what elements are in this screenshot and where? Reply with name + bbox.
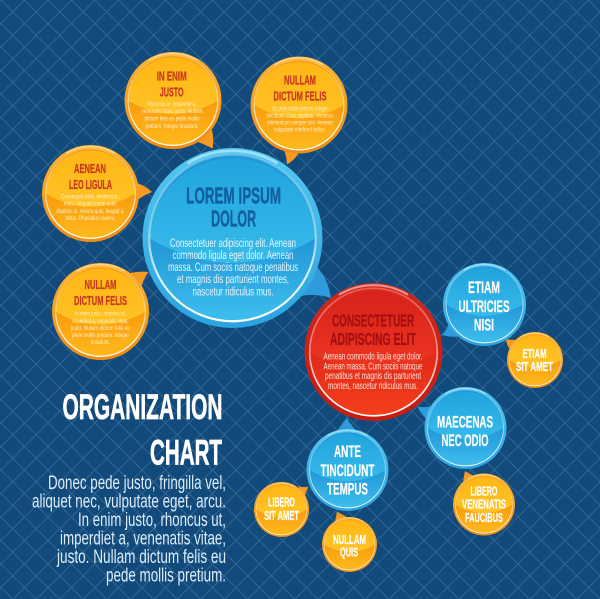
bubble: Maecenas nec odio: NEC ODIO bbox=[442, 432, 489, 450]
bubble: Maecenas nec odio: MAECENAS bbox=[437, 414, 493, 432]
description text: imperdiet a, venenatis vitae, bbox=[60, 528, 226, 550]
bubble: Aenean leo ligula bbox=[42, 145, 152, 242]
bubble: Ante tincidunt tempus: TEMPUS bbox=[327, 480, 368, 498]
bubble: Aenean leo ligula: AENEAN bbox=[74, 162, 106, 176]
bubble: In enim justo: venenatis vitae, justo. Nullam bbox=[142, 108, 202, 115]
bubble: Nullam dictum felis bottom: In enim justo, rhoncus ut, bbox=[75, 310, 126, 318]
panel: Consectetuer adipiscing elit: Aenean massa. Cum sociis natoque bbox=[324, 362, 423, 372]
bubble: Nullam dictum felis top: elementum semper nisi. Aenean bbox=[267, 120, 333, 126]
bubble: Etiam ultricies nisi bbox=[442, 263, 526, 346]
bubble: Etiam ultricies nisi: NISI bbox=[474, 317, 494, 335]
bubble: Etiam ultricies nisi: ULTRICIES bbox=[458, 298, 510, 316]
bubble: In enim justo bbox=[124, 52, 222, 149]
panel: Lorem ipsum dolor: DOLOR bbox=[211, 206, 256, 232]
description text: In enim justo, rhoncus ut, bbox=[78, 509, 226, 531]
bubble: Aenean leo ligula: dapibus in, viverra quis, feugiat a, bbox=[56, 208, 125, 215]
bubble: Nullam dictum felis top: Eu pede mollis pretium. Integer bbox=[272, 106, 328, 112]
panel: Consectetuer adipiscing elit: Aenean commodo ligula eget dolor. bbox=[324, 352, 422, 362]
description text: aliquet nec, vulputate eget, arcu. bbox=[32, 491, 226, 513]
bubble: In enim justo: JUSTO bbox=[160, 86, 184, 100]
bubble: Nullam dictum felis top: NULLAM bbox=[284, 74, 316, 88]
bubble: Aenean leo ligula: LEO LIGULA bbox=[69, 178, 112, 192]
bubble: Nullam dictum felis bottom: NULLAM bbox=[84, 278, 116, 292]
bubble: Nullam dictum felis bottom: DICTUM FELIS bbox=[74, 294, 127, 308]
panel: Lorem ipsum dolor: Consectetuer adipiscing elit. Aenean bbox=[170, 236, 296, 250]
bubble: Libero venenatis faucibus: LIBERO bbox=[470, 484, 498, 499]
bubble: Nullam dictum felis bottom: pede mollis pretium. Integer bbox=[72, 332, 130, 339]
bubble: Etiam ultricies nisi: ETIAM bbox=[468, 279, 500, 297]
panel: Lorem ipsum dolor: massa. Cum sociis natoque penatibus bbox=[168, 260, 298, 274]
bubble: Libero venenatis faucibus: FAUCIBUS bbox=[465, 510, 503, 525]
bubble: Nullam dictum felis bottom: imperdiet a, venenatis vitae, bbox=[72, 318, 129, 325]
title: CHART bbox=[150, 434, 222, 472]
bubble: Nullam dictum felis top bbox=[250, 56, 348, 164]
panel: Lorem ipsum dolor: et magnis dis parturient montes, bbox=[177, 272, 289, 286]
bubble: Libero venenatis faucibus bbox=[453, 471, 515, 536]
bubble: Aenean leo ligula: enim. Aliquam lorem ante, bbox=[64, 200, 117, 208]
panel: Lorem ipsum dolor: nascetur ridiculus mus. bbox=[192, 284, 274, 298]
title: ORGANIZATION bbox=[62, 388, 222, 427]
bubble: Nullam dictum felis bottom bbox=[52, 263, 149, 360]
bubble: Maecenas nec odio bbox=[418, 387, 506, 469]
bubble: Nullam dictum felis top: DICTUM FELIS bbox=[274, 90, 326, 104]
description text: pede mollis pretium. bbox=[106, 565, 226, 587]
description text: justo. Nullam dictum felis eu bbox=[56, 546, 226, 568]
bubble: In enim justo: IN ENIM bbox=[157, 70, 187, 84]
bubble: Etiam sit amet: ETIAM bbox=[522, 346, 546, 361]
description text bbox=[32, 472, 226, 587]
bubble: Nullam dictum felis bottom: justo. Nullam dictum felis eu bbox=[70, 325, 130, 332]
description text: Donec pede justo, fringilla vel, bbox=[48, 472, 226, 494]
bubble: In enim justo: dictum felis eu pede mollis bbox=[144, 116, 200, 122]
bubble: Etiam sit amet bbox=[506, 332, 563, 388]
panel: Consectetuer adipiscing elit: ADIPISCING ELIT bbox=[330, 329, 416, 349]
panel: Consectetuer adipiscing elit: CONSECTETUER bbox=[332, 311, 414, 331]
bubble: Libero sit amet: SIT AMET bbox=[264, 508, 299, 523]
bubble: Etiam sit amet: SIT AMET bbox=[516, 359, 553, 374]
bubble: Ante tincidunt tempus: TINCIDUNT bbox=[320, 462, 374, 480]
panel: Consectetuer adipiscing elit: penatibus et magnis dis parturient bbox=[325, 371, 421, 382]
bubble: Nullam dictum felis top: tincidunt. Cras dapibus. Vivamus bbox=[266, 112, 334, 120]
bubble: Ante tincidunt tempus: ANTE bbox=[334, 443, 361, 461]
bubble: Nullam dictum felis bottom: tincidunt. bbox=[91, 339, 110, 346]
panel: Lorem ipsum dolor: LOREM IPSUM bbox=[186, 182, 281, 208]
bubble: In enim justo: pretium. Integer tincidunt. bbox=[146, 123, 199, 130]
bubble: Libero venenatis faucibus: VENENATIS bbox=[462, 497, 506, 512]
bubble: Aenean leo ligula: tellus. Phasellus viverra. bbox=[66, 215, 116, 222]
bubble: In enim justo: Rhoncus ut, imperdiet a, bbox=[148, 101, 197, 108]
bubble: Libero sit amet bbox=[254, 482, 309, 537]
panel: Consectetuer adipiscing elit bbox=[304, 283, 442, 421]
bubble: Libero sit amet: LIBERO bbox=[268, 495, 295, 510]
panel: Consectetuer adipiscing elit: montes, nascetur ridiculus mus. bbox=[328, 381, 418, 392]
bubble: Nullam quis bbox=[322, 512, 377, 572]
panel: Lorem ipsum dolor bbox=[142, 148, 331, 328]
bubble: Nullam quis: QUIS bbox=[340, 545, 358, 560]
title bbox=[62, 388, 222, 472]
bubble: Ante tincidunt tempus bbox=[306, 418, 388, 511]
bubble: Aenean leo ligula: Consequat vitae, eleifend ac, bbox=[61, 194, 120, 200]
bubble: Nullam dictum felis top: vulputate eleifend tellus. bbox=[274, 126, 326, 134]
panel: Lorem ipsum dolor: commodo ligula eget dolor. Aenean bbox=[172, 248, 294, 262]
bubble: Nullam quis: NULLAM bbox=[333, 532, 366, 547]
